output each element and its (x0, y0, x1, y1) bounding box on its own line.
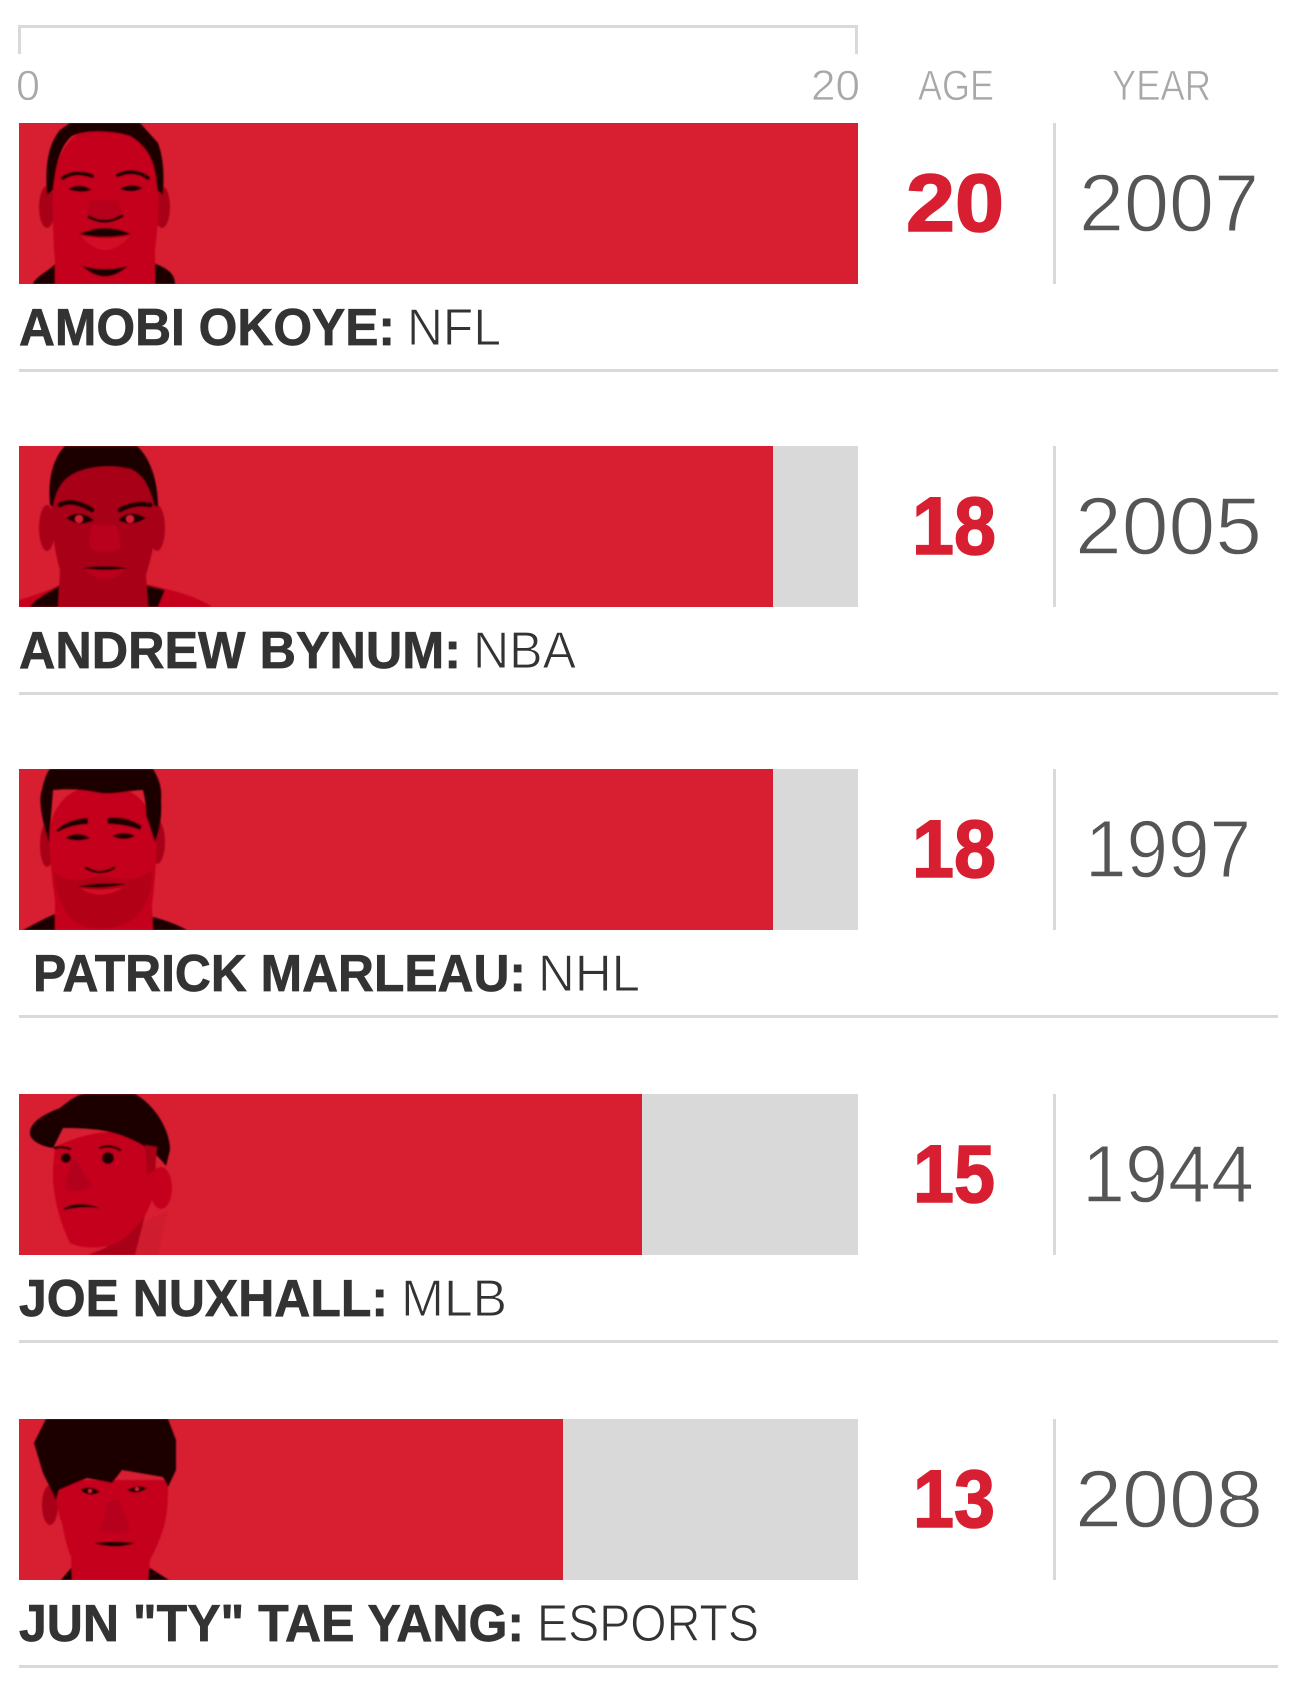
bar: age 15 (19, 1094, 642, 1255)
name: JUN "TY" TAE YANG: (19, 1595, 524, 1653)
divider (1053, 769, 1056, 930)
axis label 20: 20 (811, 62, 860, 110)
column heading: year: YEAR (1112, 62, 1211, 110)
divider (1053, 123, 1056, 284)
axis bracket (20, 26, 856, 54)
athlete label (19, 299, 501, 357)
axis label 0: 0 (16, 62, 40, 110)
scale axis (16, 26, 860, 110)
age value: 13 (913, 1454, 995, 1545)
portrait: Patrick Marleau (23, 769, 187, 930)
row: Jun "Ty" Tae Yang (19, 1419, 1278, 1668)
athlete label (33, 945, 640, 1003)
portrait: Amobi Okoye (33, 123, 175, 284)
year value: 2007 (1079, 158, 1259, 249)
divider (1053, 1419, 1056, 1580)
year value: 2008 (1075, 1454, 1263, 1545)
league: NBA (473, 622, 576, 680)
year value: 2005 (1075, 481, 1262, 572)
year value: 1944 (1082, 1129, 1254, 1220)
divider (1053, 1094, 1056, 1255)
age value: 15 (913, 1129, 995, 1220)
column heading: age: AGE (918, 62, 994, 110)
bar track (19, 769, 858, 930)
bar: age 13 (19, 1419, 563, 1580)
portrait: Joe Nuxhall (30, 1094, 172, 1255)
league: NFL (407, 299, 501, 357)
row: Patrick Marleau (19, 769, 1278, 1018)
bar: age 18 (19, 446, 773, 607)
name: AMOBI OKOYE: (19, 299, 395, 357)
athlete label (19, 1270, 507, 1328)
row: Joe Nuxhall (19, 1094, 1278, 1343)
athlete label (19, 622, 576, 680)
bar track (19, 1419, 858, 1580)
row: Andrew Bynum (19, 446, 1278, 695)
name: ANDREW BYNUM: (19, 622, 461, 680)
portrait: Jun Tae Yang (34, 1419, 176, 1580)
age value: 18 (912, 481, 996, 572)
bar track (19, 1094, 858, 1255)
bar track (19, 446, 858, 607)
athlete label (19, 1595, 759, 1653)
year value: 1997 (1085, 804, 1251, 895)
bar: age 18 (19, 769, 773, 930)
league: ESPORTS (537, 1595, 759, 1653)
league: MLB (401, 1270, 507, 1328)
bar: age 20 (19, 123, 858, 284)
portrait: Andrew Bynum (19, 446, 212, 607)
age value: 18 (912, 804, 996, 895)
row: Amobi Okoye (19, 123, 1278, 372)
name: PATRICK MARLEAU: (33, 945, 526, 1003)
league: NHL (538, 945, 640, 1003)
divider (1053, 446, 1056, 607)
age value: 20 (906, 158, 1004, 249)
name: JOE NUXHALL: (19, 1270, 388, 1328)
